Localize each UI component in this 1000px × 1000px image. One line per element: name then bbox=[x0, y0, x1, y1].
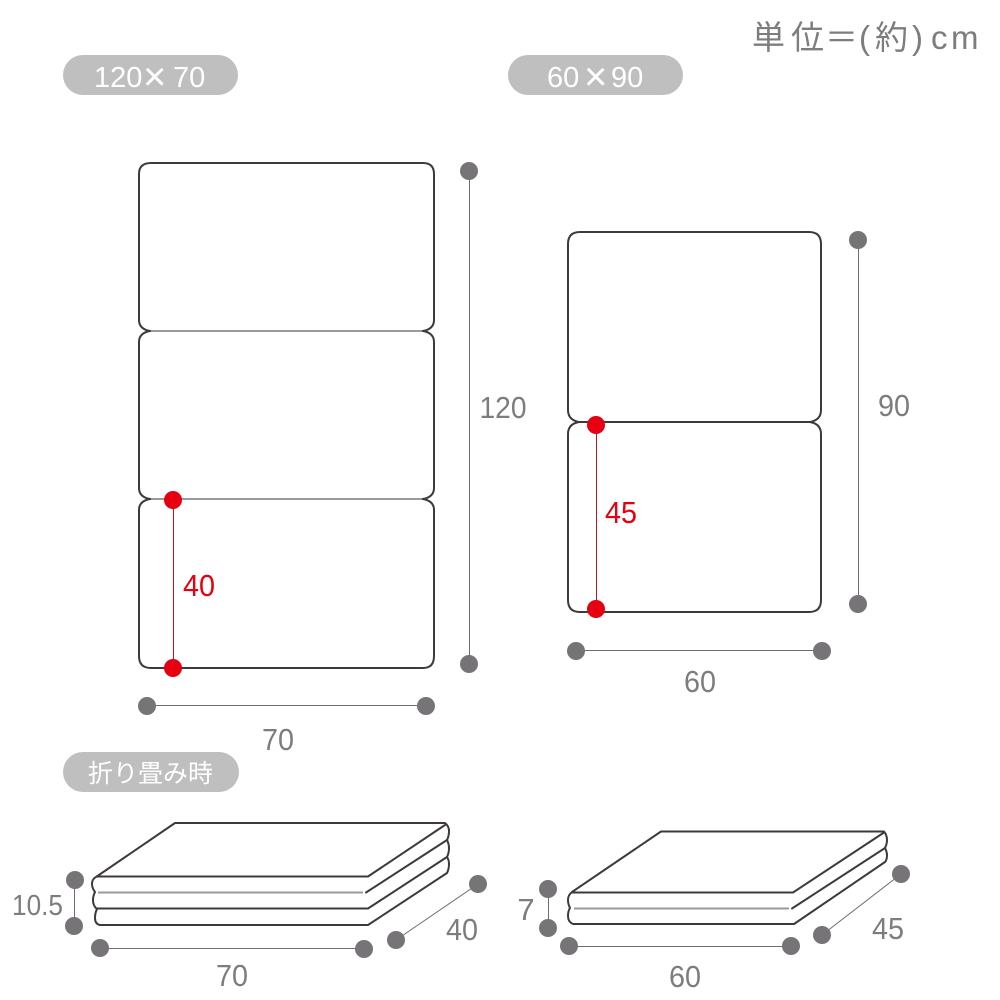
dimension: folded depth 40: 40 bbox=[446, 912, 478, 947]
dimension: folded depth 40 bbox=[387, 875, 487, 949]
dimension: folded width 60: 60 bbox=[669, 959, 701, 994]
mat diagram: 120x70 bbox=[139, 163, 434, 668]
badge: folded bbox=[63, 752, 239, 792]
badge: 120x70: 120 bbox=[94, 62, 142, 94]
dimension: height 120 bbox=[460, 162, 526, 673]
badge: 120x70: × bbox=[143, 55, 166, 99]
dimension: folded height 7 bbox=[517, 880, 557, 937]
folded mat: three layers bbox=[92, 823, 449, 925]
badge: 60x90: × bbox=[584, 55, 607, 99]
badge: 60x90 bbox=[508, 55, 683, 99]
dimension: width 60: 60 bbox=[684, 664, 716, 699]
dimension: width 70: 70 bbox=[262, 722, 294, 757]
red dimension: fold 40: 40 bbox=[183, 568, 215, 603]
badge: 60x90: 60 bbox=[547, 62, 579, 94]
dimension: height 90 bbox=[849, 231, 910, 613]
dimension: folded width 70 bbox=[91, 939, 373, 993]
mat diagram: 60x90 bbox=[568, 232, 821, 612]
dimension: width 70 bbox=[138, 697, 435, 757]
dimension: height 120: 120 bbox=[480, 390, 526, 425]
dimension: folded width 60 bbox=[560, 937, 800, 994]
dimension: folded width 70: 70 bbox=[216, 958, 248, 993]
badge: folded: 折り畳み時 bbox=[88, 760, 213, 788]
dimension: height 90: 90 bbox=[878, 388, 910, 423]
badge: 120x70 bbox=[63, 55, 238, 99]
badge: 60x90: 90 bbox=[611, 62, 643, 94]
dimension: folded height 10.5: 10.5 bbox=[12, 890, 63, 922]
badge: 120x70: 70 bbox=[173, 62, 205, 94]
red dimension: fold 40 bbox=[164, 491, 215, 677]
folded mat: two layers bbox=[568, 832, 887, 924]
dimension: folded depth 45: 45 bbox=[872, 911, 904, 946]
dimension: folded height 10.5 bbox=[12, 871, 84, 935]
unit note: 単位＝(約)cm bbox=[752, 19, 978, 56]
red dimension: fold 45: 45 bbox=[605, 495, 637, 530]
dimension: folded depth 45 bbox=[813, 865, 910, 946]
dimension: folded height 7: 7 bbox=[517, 892, 535, 927]
dimension: width 60 bbox=[567, 642, 831, 699]
red dimension: fold 45 bbox=[587, 416, 637, 618]
